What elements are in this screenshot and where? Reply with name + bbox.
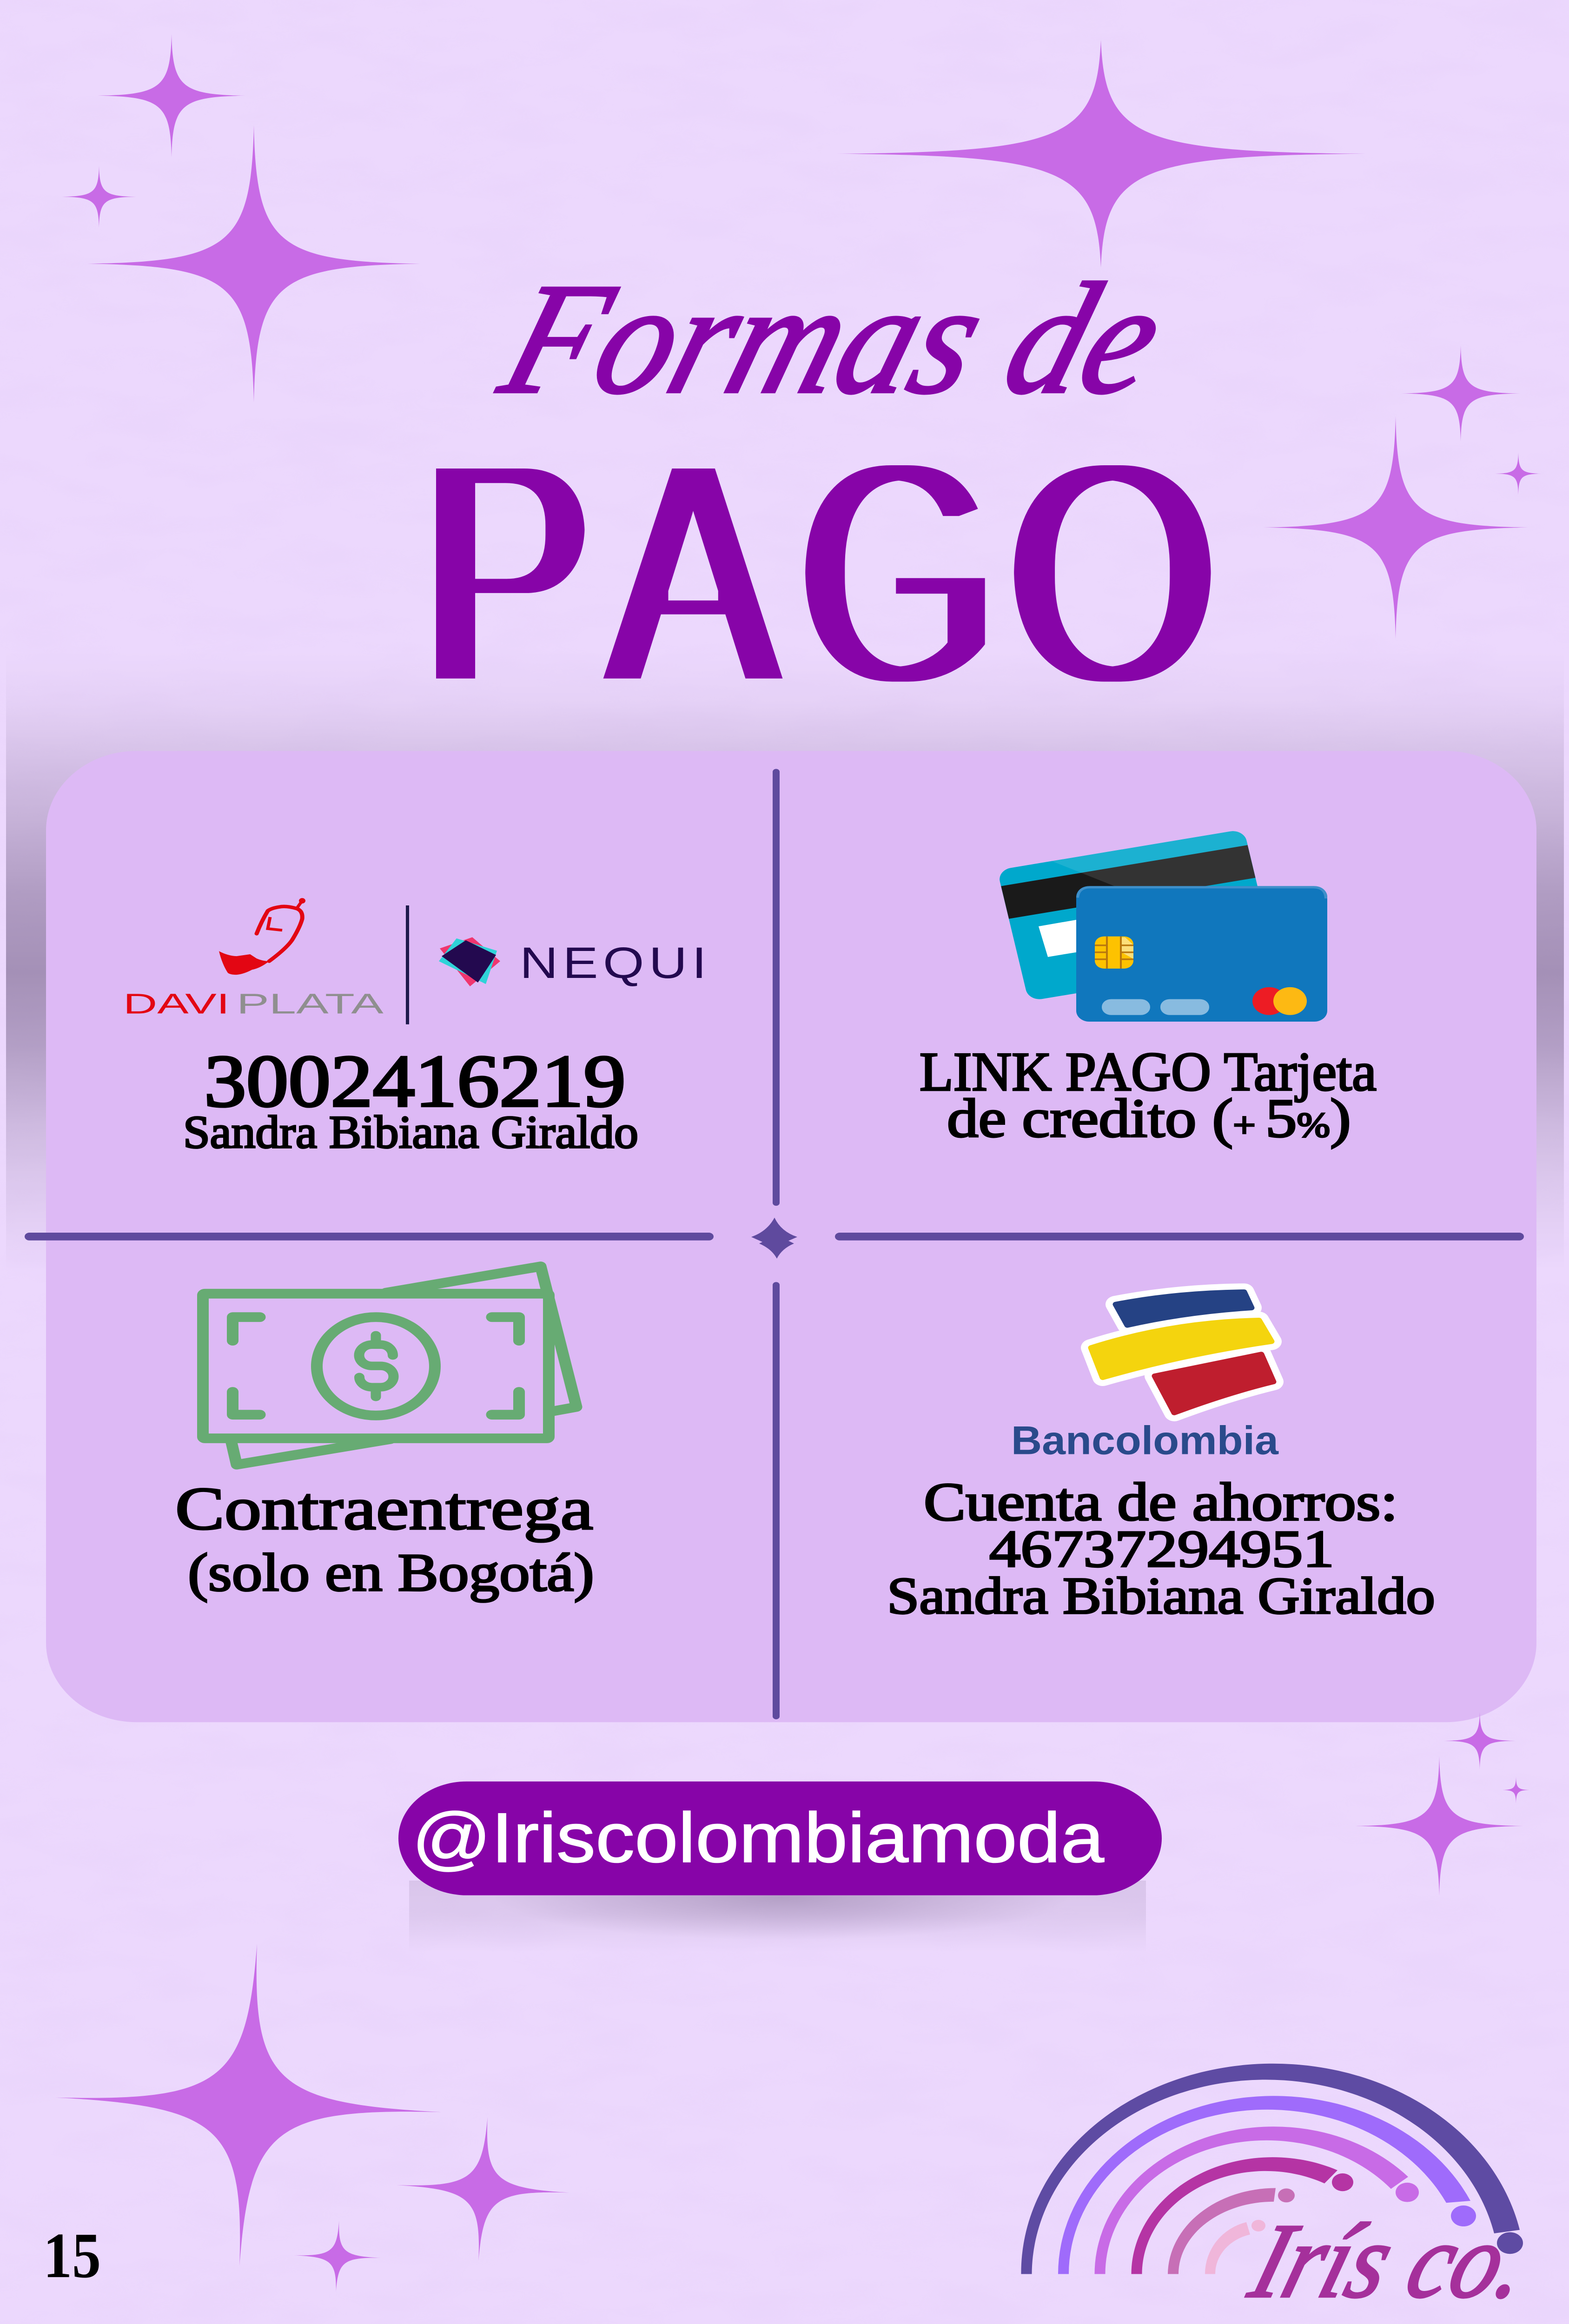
phone number: 3002416219 — [204, 1040, 626, 1122]
logo divider — [406, 905, 409, 1024]
icon: sparkle small left — [62, 166, 136, 228]
icon: sparkle lower right medium — [1356, 1756, 1523, 1895]
account number: 46737294951 — [989, 1520, 1334, 1578]
cell: Daviplata and Nequi — [123, 898, 707, 1157]
icon: sparkle large top centre — [836, 40, 1366, 268]
icon: sparkle bottom medium — [392, 2113, 574, 2265]
icon: Daviplata logo — [123, 898, 384, 1020]
cell: Bancolombia — [887, 1292, 1435, 1625]
label: solo en Bogota: (solo en Bogotá) — [188, 1543, 594, 1602]
cell: credit card link — [920, 829, 1377, 1149]
label: cuenta de ahorros: Cuenta de ahorros: — [924, 1472, 1398, 1532]
icon: centre star — [751, 1218, 797, 1259]
account holder name: Sandra Bibiana Giraldo — [887, 1567, 1435, 1625]
icon: Bancolombia logo — [1091, 1292, 1273, 1413]
band shadow behind panel — [6, 651, 1564, 1270]
icon: Daviplata logo: DAVI — [123, 988, 230, 1020]
logo: Iris co rainbow — [1021, 2064, 1544, 2320]
divider cross lines — [29, 772, 1519, 1717]
title: PAGO: P — [424, 395, 590, 751]
title: Formas de: Formas de — [483, 251, 1182, 427]
icon: sparkle large left — [87, 125, 420, 403]
icon: sparkle right large — [1263, 416, 1528, 639]
icon: banknotes — [203, 1267, 576, 1465]
label: link pago: LINK PAGO Tarjeta — [920, 1042, 1377, 1103]
icon: sparkle top left — [98, 34, 245, 157]
title: PAGO: G — [801, 395, 996, 751]
label: contraentrega: Contraentrega — [175, 1475, 593, 1542]
title: PAGO: O — [1009, 395, 1216, 751]
icon: sparkle right medium — [1401, 345, 1520, 442]
icon: Nequi logo: NEQUI — [520, 938, 707, 988]
label: handle: @Iriscolombiamoda — [412, 1798, 1105, 1877]
cell: cash on delivery — [175, 1267, 594, 1602]
label: Bancolombia wordmark: Bancolombia — [1011, 1418, 1279, 1463]
icon: sparkle lower right small — [1444, 1712, 1516, 1770]
icon: sparkle bottom small — [293, 2219, 382, 2294]
page number: 15 — [43, 2220, 101, 2291]
pill: instagram handle — [398, 1782, 1162, 1895]
icon: sparkle bottom left large — [46, 1936, 450, 2273]
title: PAGO: A — [608, 395, 780, 751]
icon: Nequi logo — [439, 937, 707, 988]
icon: sparkle right tiny — [1495, 452, 1542, 495]
pill shadow — [409, 1855, 1146, 1952]
account holder name: Sandra Bibiana Giraldo — [183, 1106, 638, 1157]
icon: credit cards — [997, 829, 1327, 1022]
title: PAGO — [424, 395, 1216, 751]
label: de credito: de credito (+ 5%) — [947, 1088, 1351, 1149]
icon: sparkle lower right tiny — [1502, 1776, 1530, 1803]
panel: payment methods — [29, 751, 1536, 1722]
icon: Daviplata logo: PLATA — [237, 988, 384, 1020]
